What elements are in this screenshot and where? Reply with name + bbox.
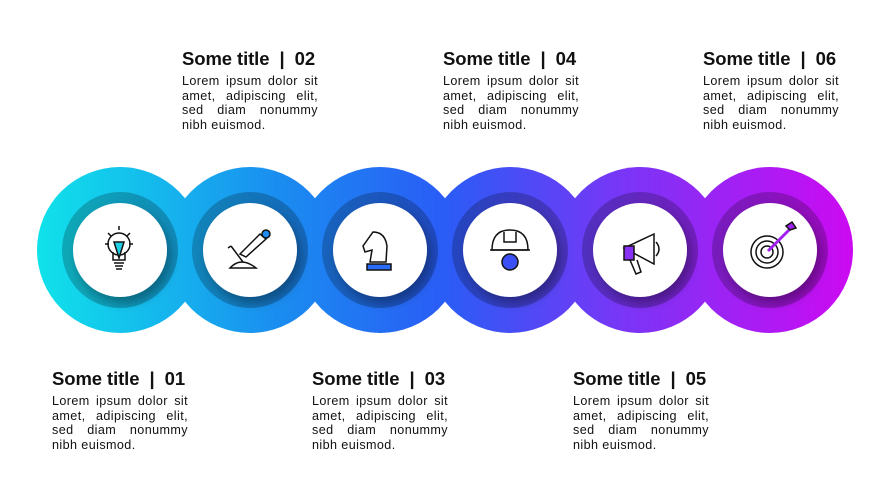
text block 04: nibh euismod. [443,118,527,132]
text block 01: sed diam nonummy [52,423,188,437]
text block 06: nibh euismod. [703,118,787,132]
text block 03: Lorem ipsum dolor sit [312,394,448,408]
icon: helmet gear [490,230,530,270]
text block 01: nibh euismod. [52,438,136,452]
text block 05 [573,368,709,452]
text block 03 [312,368,448,452]
text block 05: sed diam nonummy [573,423,709,437]
text block 02: Lorem ipsum dolor sit [182,74,318,88]
text block 01: Lorem ipsum dolor sit [52,394,188,408]
text block 02: nibh euismod. [182,118,266,132]
text block 06: sed diam nonummy [703,103,839,117]
icon: megaphone [624,234,659,274]
text block 05: Lorem ipsum dolor sit [573,394,709,408]
text block 03: Some title | 03 [312,368,445,389]
text block 01: Some title | 01 [52,368,185,389]
text block 04: Lorem ipsum dolor sit [443,74,579,88]
text block 05: nibh euismod. [573,438,657,452]
text block 02 [182,48,318,132]
text block 02: sed diam nonummy [182,103,318,117]
icon: microscope [228,230,270,268]
text block 04 [443,48,579,132]
icon: target [751,222,796,268]
text block 03: nibh euismod. [312,438,396,452]
text block 03: amet, adipiscing elit, [312,409,448,423]
text block 06: Some title | 06 [703,48,836,69]
text block 02: Some title | 02 [182,48,315,69]
text block 05: amet, adipiscing elit, [573,409,709,423]
icon: chess knight [363,232,391,270]
text block 04: amet, adipiscing elit, [443,89,579,103]
text block 01 [52,368,188,452]
text block 02: amet, adipiscing elit, [182,89,318,103]
icon: light bulb [105,226,133,269]
text block 05: Some title | 05 [573,368,706,389]
text block 03: sed diam nonummy [312,423,448,437]
text block 06: Lorem ipsum dolor sit [703,74,839,88]
text block 04: Some title | 04 [443,48,576,69]
text block 04: sed diam nonummy [443,103,579,117]
text block 01: amet, adipiscing elit, [52,409,188,423]
text block 06: amet, adipiscing elit, [703,89,839,103]
text block 06 [703,48,839,132]
